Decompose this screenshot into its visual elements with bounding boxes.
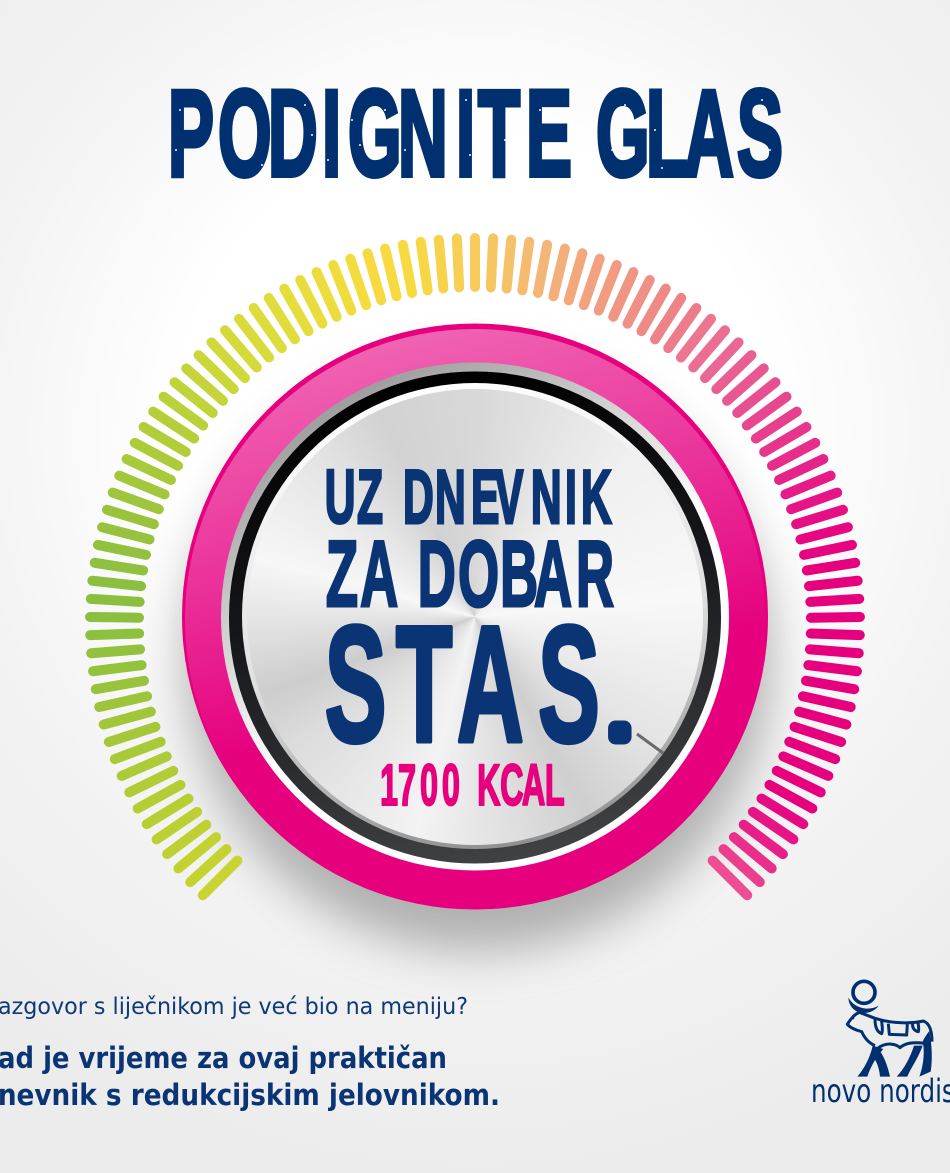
icon: apis bull with sun disc [847, 981, 932, 1077]
calorie label: 1700 KCAL [380, 752, 565, 817]
knob indicator needle [637, 734, 663, 753]
knob heading: stas: . [612, 683, 628, 750]
knob heading: stas: STAS [325, 593, 600, 777]
title speckle texture [176, 100, 770, 168]
title: PODIGNITE [168, 66, 572, 203]
knob heading: uz dnevnik za dobar: UZ DNEVNIK [325, 455, 612, 540]
gauge ticks [90, 238, 860, 895]
brushed metal disc [247, 389, 703, 845]
logo: novo nordisk [811, 981, 950, 1110]
metallic bezel rings [221, 362, 729, 870]
knob heading: uz dnevnik za dobar: ZA DOBAR [326, 522, 614, 627]
call to action text [0, 1041, 500, 1112]
knob heading: uz dnevnik za dobar [325, 455, 614, 627]
pink knob ring [182, 324, 768, 910]
title [168, 66, 783, 203]
title: GLAS [596, 66, 783, 203]
knob drop shadow [184, 363, 772, 951]
